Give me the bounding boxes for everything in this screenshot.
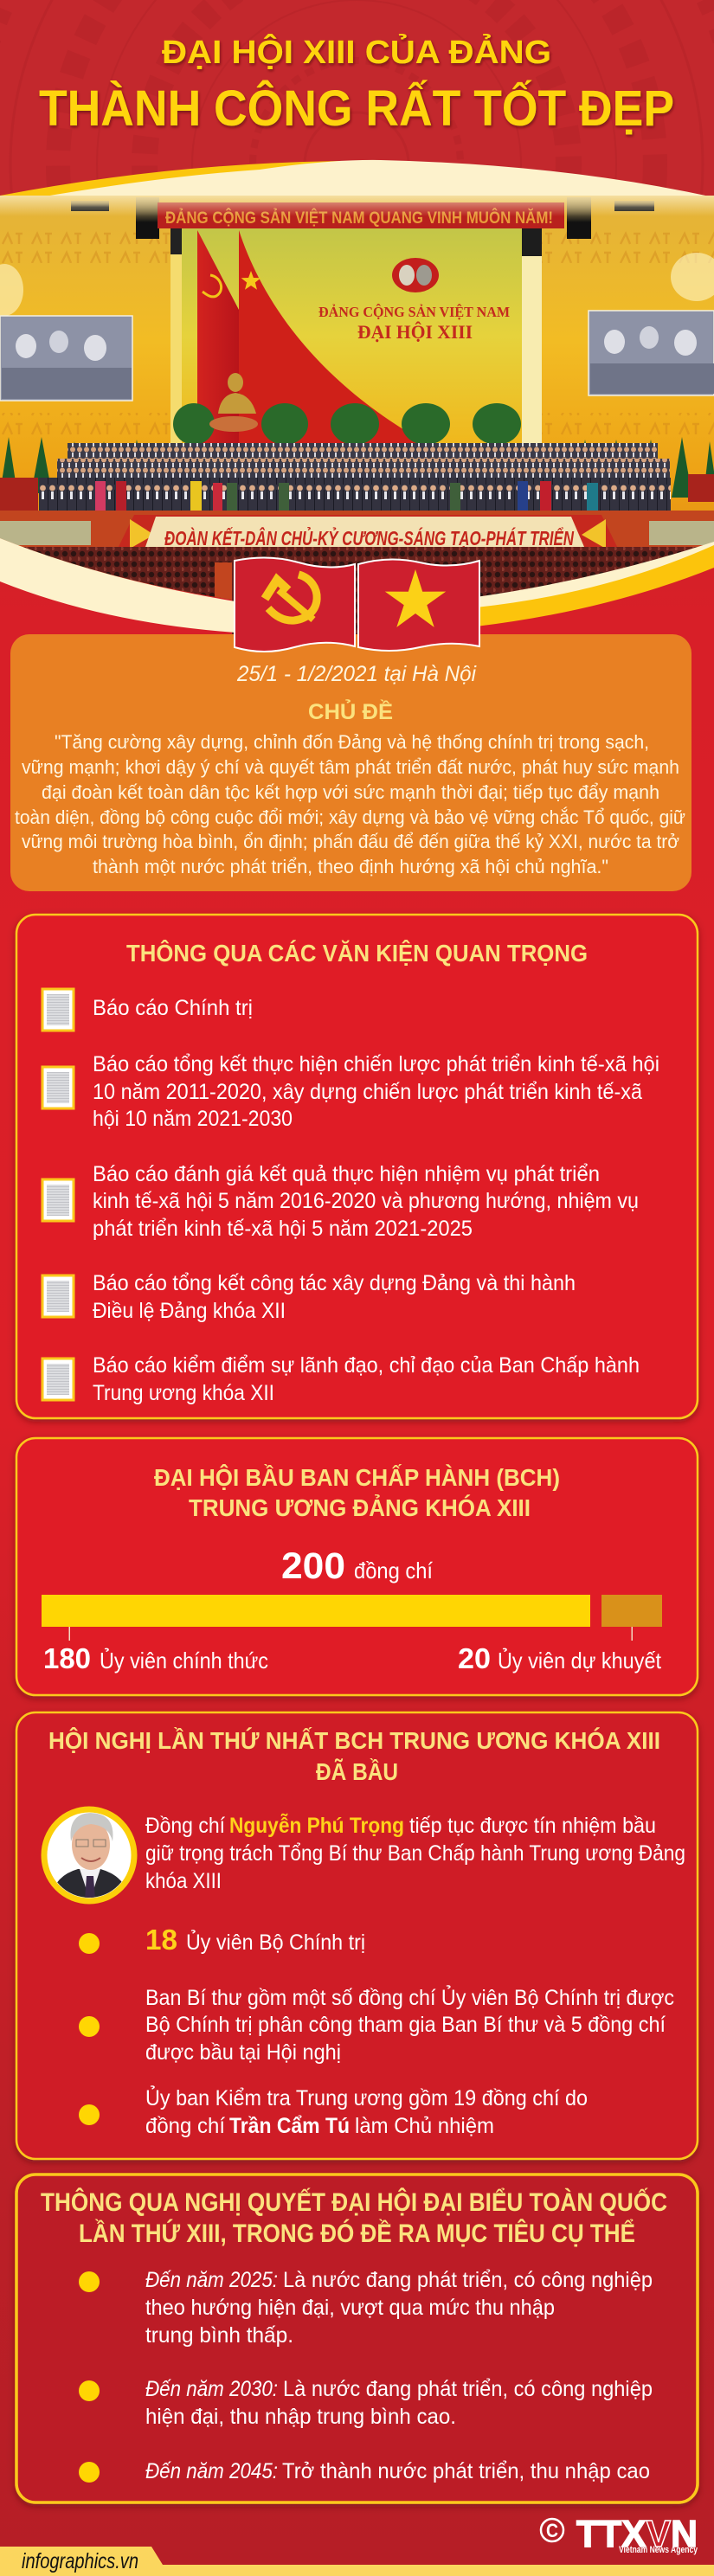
- general secretary text: [145, 1812, 685, 1893]
- general secretary text: tiếp tục được tín nhiệm bầu: [409, 1814, 656, 1838]
- red stage floor: [0, 511, 714, 547]
- black rigging: [71, 197, 654, 239]
- bust: [218, 373, 256, 414]
- inspection commission text: Ủy ban Kiểm tra Trung ương gồm 19 đồng chí do: [145, 2085, 588, 2110]
- plenum heading: [48, 1726, 660, 1785]
- secretariat text: được bầu tại Hội nghị: [145, 2040, 341, 2065]
- national flag: [358, 559, 479, 651]
- title: [39, 32, 674, 137]
- stage text: ĐẢNG CỘNG SẢN VIỆT NAM: [318, 304, 510, 320]
- bar chart: members split: [42, 1595, 662, 1641]
- general secretary text: khóa XIII: [145, 1869, 222, 1893]
- document item 3: kinh tế-xã hội 5 năm 2016-2020 và phương hướng, nhiệm vụ: [93, 1189, 639, 1213]
- icon: document 4: [42, 1275, 74, 1317]
- theme quote: vững môi trường hòa bình, ổn định; phấn đấu để đến giữa thế kỷ XXI, nước ta trở: [22, 831, 679, 852]
- stage text: ĐẠI HỘI XIII: [357, 321, 473, 343]
- left screen: [0, 316, 132, 401]
- top fade of the photo: [0, 196, 714, 216]
- slogan flower banner: ĐOÀN KẾT-DÂN CHỦ-KỶ CƯƠNG-SÁNG TẠO-PHÁT TRIỂN: [164, 526, 574, 549]
- large red drape: [239, 230, 433, 446]
- target 2025: trung bình thấp.: [145, 2323, 293, 2348]
- icon: bullet: [79, 1933, 100, 1954]
- panel: resolution targets: [16, 2175, 698, 2502]
- icon: document 3: [42, 1179, 74, 1221]
- secretariat text: Ban Bí thư gồm một số đồng chí Ủy viên Bộ Chính trị được: [145, 1984, 674, 2010]
- side podiums: [0, 474, 714, 511]
- alternate members label: Ủy viên dự khuyết: [498, 1647, 662, 1673]
- official members label: [43, 1642, 268, 1674]
- politburo count: 18: [145, 1924, 177, 1956]
- document item 2: Báo cáo tổng kết thực hiện chiến lược phát triển kinh tế-xã hội: [93, 1052, 659, 1076]
- slogan flower banner: [119, 515, 617, 547]
- alternate members label: [458, 1642, 662, 1674]
- theme quote: vững mạnh; khơi dậy ý chí và quyết tâm phát triển đất nước, phát huy sức mạnh: [22, 756, 679, 778]
- alternate members label: 20: [458, 1642, 491, 1674]
- icon: bullet: [79, 2462, 100, 2483]
- target 2025: theo hướng hiện đại, vượt qua mức thu nhập: [145, 2296, 555, 2320]
- congress hall photo: [0, 196, 714, 659]
- star on drape: [241, 271, 261, 290]
- header arc: cream and yellow swoosh: [0, 160, 714, 208]
- panel: central committee election: [16, 1438, 698, 1695]
- document item 3: [93, 1162, 639, 1241]
- document item 5: Báo cáo kiểm điểm sự lãnh đạo, chỉ đạo của Ban Chấp hành: [93, 1353, 640, 1378]
- hammer and sickle: [265, 575, 317, 620]
- theme quote: [15, 731, 685, 877]
- emblem: [392, 258, 439, 292]
- title line 2: THÀNH CÔNG RẤT TỐT ĐẸP: [39, 80, 674, 137]
- inspection commission text: [145, 2085, 588, 2138]
- document item 3: Báo cáo đánh giá kết quả thực hiện nhiệm vụ phát triển: [93, 1162, 600, 1186]
- theme quote: "Tăng cường xây dựng, chỉnh đốn Đảng và hệ thống chính trị trong sạch,: [55, 731, 649, 753]
- star: [385, 569, 446, 627]
- target 2025: [145, 2268, 653, 2348]
- flags: [235, 557, 479, 652]
- aisle: [215, 562, 232, 601]
- panel: first plenum: [16, 1712, 698, 2159]
- flowers side: [0, 521, 714, 545]
- date: 25/1 - 1/2/2021 tại Hà Nội: [236, 662, 477, 686]
- theme heading: CHỦ ĐỀ: [308, 698, 393, 724]
- secretariat text: Bộ Chính trị phân công tham gia Ban Bí thư và 5 đồng chí: [145, 2013, 666, 2037]
- icon: document 2: [42, 1067, 74, 1108]
- hall walls: [0, 196, 714, 611]
- inspection commission text: đồng chí: [145, 2114, 225, 2138]
- document item 2: hội 10 năm 2021-2030: [93, 1107, 293, 1131]
- banner above stage: ĐẢNG CỘNG SẢN VIỆT NAM QUANG VINH MUÔN NĂM!: [165, 209, 553, 228]
- bottom left cream band: [0, 538, 235, 633]
- icon: bullet: [79, 2271, 100, 2292]
- official members label: Ủy viên chính thức: [100, 1647, 268, 1673]
- icon: document 5: [42, 1359, 74, 1400]
- politburo count: [145, 1924, 365, 1956]
- document item 2: 10 năm 2011-2020, xây dựng chiến lược phát triển kinh tế-xã: [93, 1080, 642, 1104]
- target 2025: Đến năm 2025:: [145, 2268, 278, 2292]
- documents heading: THÔNG QUA CÁC VĂN KIỆN QUAN TRỌNG: [126, 939, 588, 967]
- banner above stage: [158, 202, 564, 228]
- plenum heading: HỘI NGHỊ LẦN THỨ NHẤT BCH TRUNG ƯƠNG KHÓA XIII: [48, 1726, 660, 1754]
- icon: document 1: [42, 989, 74, 1031]
- document item 4: Báo cáo tổng kết công tác xây dựng Đảng và thi hành: [93, 1271, 576, 1295]
- orange theme panel: [10, 634, 691, 891]
- total count: đồng chí: [354, 1558, 434, 1584]
- document item 5: Trung ương khóa XII: [93, 1381, 274, 1405]
- target 2030: hiện đại, thu nhập trung bình cao.: [145, 2405, 456, 2429]
- document item 4: Điều lệ Đảng khóa XII: [93, 1299, 286, 1323]
- election heading: ĐẠI HỘI BẦU BAN CHẤP HÀNH (BCH): [154, 1463, 560, 1491]
- inspection commission text: làm Chủ nhiệm: [355, 2114, 494, 2138]
- panel: documents: [16, 915, 698, 1418]
- bottom right cream and yellow swoosh: [476, 542, 714, 626]
- plenum heading: ĐÃ BẦU: [316, 1758, 398, 1785]
- right screen: [589, 311, 714, 395]
- stage columns: [170, 228, 542, 445]
- target 2045: Trở thành nước phát triển, thu nhập cao: [282, 2459, 650, 2483]
- document item 3: phát triển kinh tế-xã hội 5 năm 2021-2025: [93, 1217, 473, 1241]
- document item 5: [93, 1353, 640, 1405]
- party flag: [235, 557, 355, 652]
- stage text: [318, 304, 510, 343]
- left red drape: [197, 230, 239, 445]
- plants: [173, 403, 521, 445]
- document item 4: [93, 1271, 576, 1323]
- source label: infographics.vn: [22, 2549, 138, 2573]
- target 2025: Là nước đang phát triển, có công nghiệp: [283, 2268, 653, 2292]
- total count: 200: [281, 1545, 345, 1587]
- targets heading: [41, 2187, 667, 2248]
- portrait: [44, 1809, 134, 1901]
- politburo count: Ủy viên Bộ Chính trị: [186, 1929, 365, 1955]
- footer strip: [0, 2547, 714, 2576]
- TTXVN logo: C: [546, 2520, 558, 2541]
- target 2045: Đến năm 2045:: [145, 2459, 278, 2483]
- inspection commission text: Trần Cẩm Tú: [229, 2114, 350, 2138]
- icon: bullet: [79, 2104, 100, 2125]
- stage backdrop: [182, 228, 522, 445]
- hammer and sickle on drape: [203, 275, 222, 297]
- document item 1: Báo cáo Chính trị: [93, 996, 253, 1020]
- secretariat text: [145, 1984, 674, 2065]
- election heading: [154, 1463, 560, 1521]
- targets heading: LẦN THỨ XIII, TRONG ĐÓ ĐỀ RA MỤC TIÊU CỤ THỂ: [79, 2219, 635, 2248]
- icon: bullet: [79, 2380, 100, 2401]
- general secretary text: Đồng chí: [145, 1814, 225, 1838]
- audience: [23, 547, 698, 634]
- icon: bullet: [79, 2016, 100, 2037]
- delegates group: [39, 443, 671, 512]
- general secretary text: Nguyễn Phú Trọng: [229, 1812, 404, 1838]
- target 2030: Đến năm 2030:: [145, 2377, 278, 2401]
- title line 1: ĐẠI HỘI XIII CỦA ĐẢNG: [162, 32, 551, 71]
- target 2030: [145, 2377, 653, 2429]
- theme quote: toàn diện, đồng bộ công cuộc đổi mới; xây dựng và bảo vệ vững chắc Tổ quốc, giữ: [15, 806, 685, 828]
- total count: [281, 1545, 434, 1587]
- TTXVN logo: TTXVN: [576, 2513, 698, 2555]
- cypress trees: [0, 437, 714, 502]
- election heading: TRUNG ƯƠNG ĐẢNG KHÓA XIII: [189, 1494, 531, 1521]
- official members label: 180: [43, 1642, 91, 1674]
- document item 2: [93, 1052, 659, 1131]
- theme quote: đại đoàn kết toàn dân tộc kết hợp với sức mạnh thời đại; tiếp tục đẩy mạnh: [42, 781, 659, 803]
- target 2030: Là nước đang phát triển, có công nghiệp: [283, 2377, 653, 2401]
- theme quote: thành một nước phát triển, theo định hướng xã hội chủ nghĩa.": [93, 856, 608, 877]
